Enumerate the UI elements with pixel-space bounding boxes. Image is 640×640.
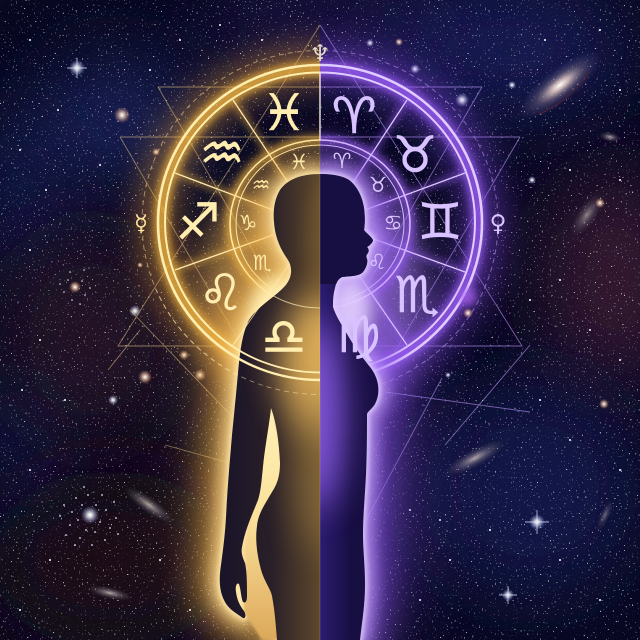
galaxy: far lower right [594,498,616,532]
icon: pluto: ♆ [310,41,330,67]
galaxy: small right [598,130,622,144]
zodiac wheel: gold half [142,50,320,371]
rings [320,64,484,372]
lower rings over the gold body [156,290,320,395]
silhouette glow [220,174,378,640]
halo behind wheel and figure [157,64,483,640]
icon: taurus: ♉ [393,126,437,184]
outer zodiac glyphs: violet [332,87,462,364]
icon: small aries: ♈ [333,149,351,173]
dashed orbit [142,50,320,371]
icon: gemini: ♊ [418,193,462,251]
bright neck-shoulder glow [241,267,372,338]
icon: virgo: ♍ [336,306,380,364]
sector dividers [352,100,465,345]
galaxy: upper right spiral [509,40,611,130]
star cluster: lower left [60,487,118,545]
icon: sagittarius: ♐ [176,193,220,251]
outer zodiac glyphs: gold [176,84,306,366]
icon: small pisces: ♓ [290,150,308,174]
icon: small scorpio: ♏ [253,251,272,275]
inner zodiac glyphs: gold [239,150,308,275]
glow between arm and torso [244,404,284,640]
zodiac wheel: violet half [320,50,498,384]
silhouette: violet half [320,174,378,640]
sector dividers [175,100,290,345]
icon: mercury: ☿ [134,211,148,237]
ring glow [320,56,492,373]
ring glow [148,56,320,359]
galaxy: right middle [564,188,610,242]
icon: small cancer: ♋ [384,211,402,235]
icon: leo: ♌ [199,264,243,322]
galaxy: lower right [441,434,509,482]
center divide line [319,73,321,640]
galaxy: lower left [120,481,178,529]
inner zodiac glyphs: violet [333,149,402,274]
icon: libra: ♎ [262,308,306,366]
icon: aries: ♈ [332,87,376,145]
violet nebula spark [459,288,477,318]
icon: small aquarius: ♒ [252,173,270,197]
sacred geometry lines [108,25,530,522]
silhouette: gold half [220,174,320,640]
galaxies [60,40,622,604]
icon: pisces: ♓ [262,84,306,142]
icon: venus: ♀ [490,211,506,237]
icon: small taurus: ♉ [369,173,387,197]
gold geometry [108,25,320,480]
planet glyphs [134,41,506,237]
icon: aquarius: ♒ [200,124,244,182]
rings [156,64,320,356]
icon: small leo: ♌ [368,250,386,274]
dashed orbit [324,50,498,384]
galaxy: bottom left [86,582,134,604]
violet geometry [320,25,530,522]
icon: scorpio: ♏ [395,266,439,324]
icon: small capricorn: ♑ [239,211,257,235]
star cluster: left [60,270,90,304]
